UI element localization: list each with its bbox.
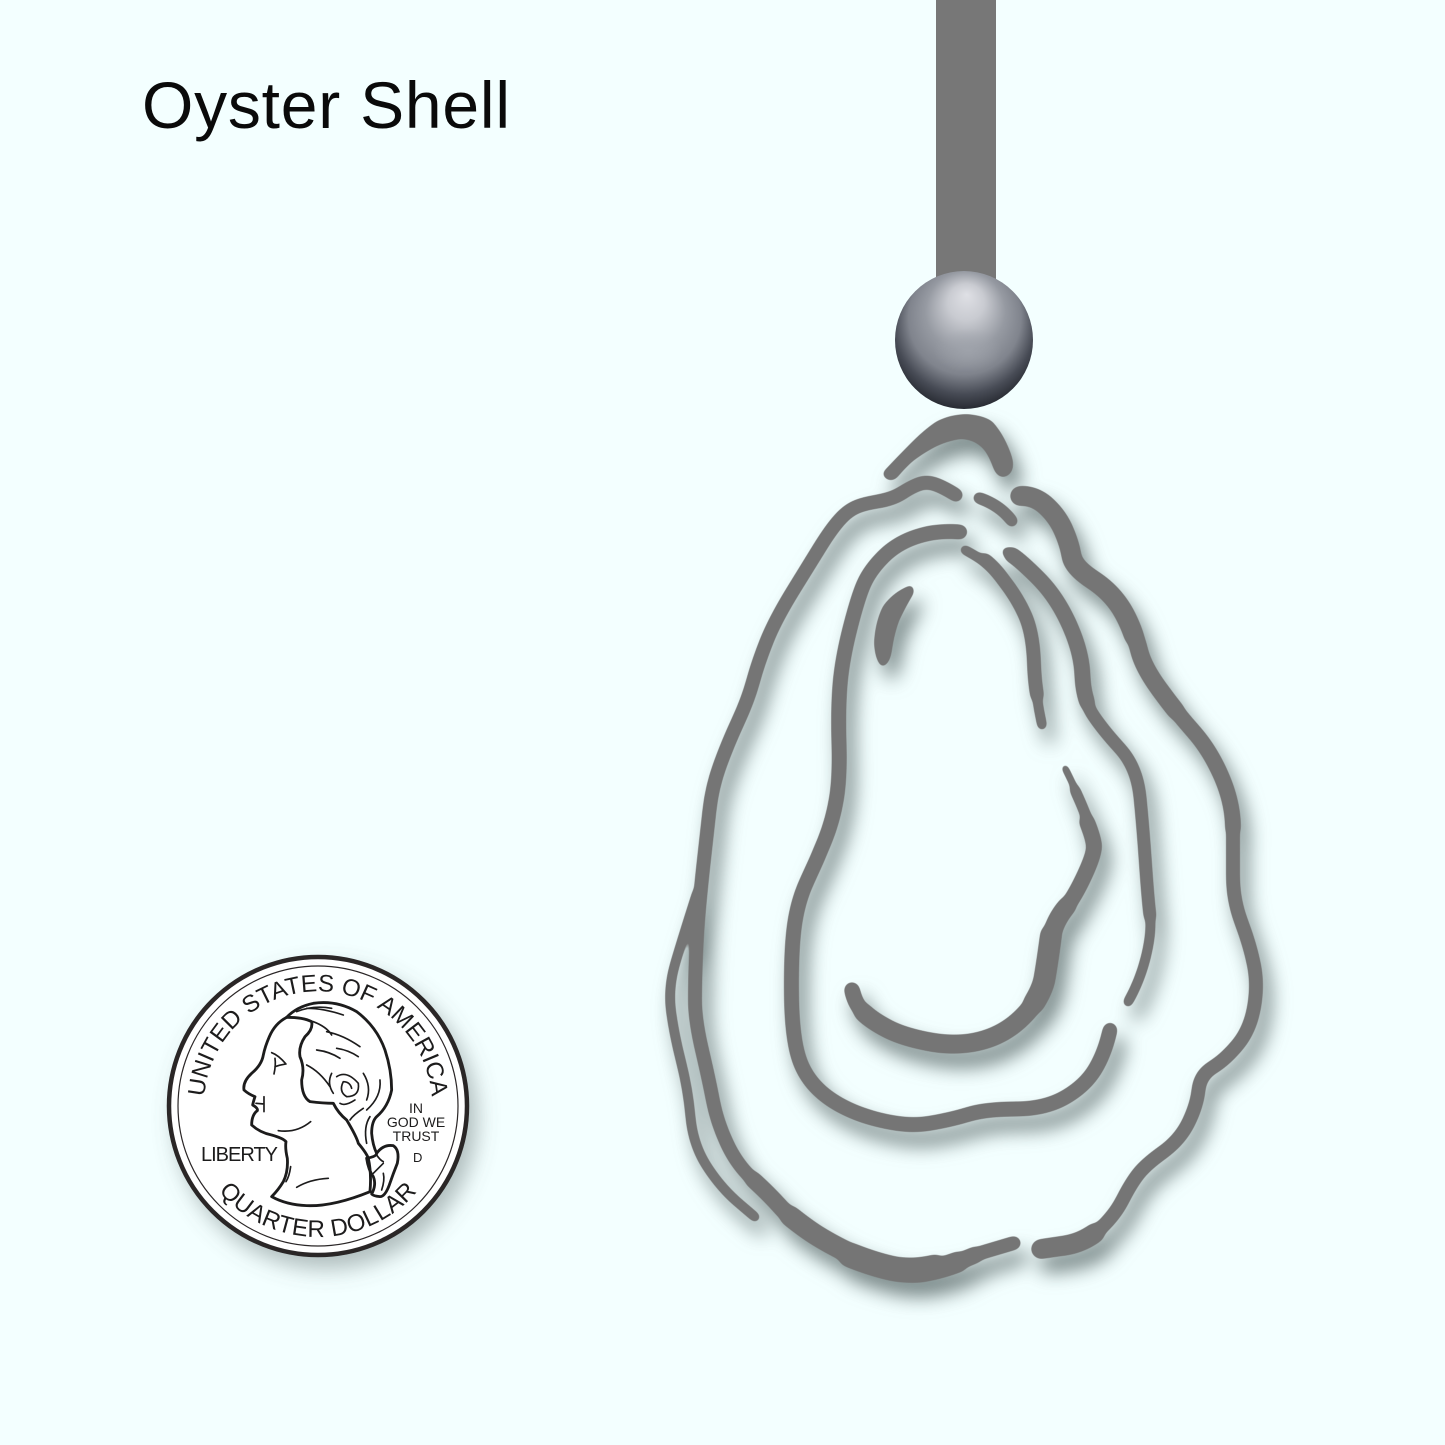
oyster shell outline xyxy=(670,414,1256,1272)
shell: adductor arc end xyxy=(852,990,887,1028)
title: Oyster Shell xyxy=(142,68,510,142)
shell: outer left edge xyxy=(695,483,1014,1272)
shell: middle right arc xyxy=(1007,552,1150,1002)
shell: adductor arc thick side xyxy=(1034,935,1051,1003)
coin: mint mark: D xyxy=(413,1150,422,1165)
shell: adductor arc bottom xyxy=(863,906,1067,1044)
shell: middle right arc top band xyxy=(1012,555,1087,702)
shell: outer right edge xyxy=(1020,496,1256,1249)
pearl ball xyxy=(895,271,1033,409)
shell: adductor arc upper xyxy=(1075,790,1094,845)
coin: motto: IN xyxy=(409,1100,423,1116)
portrait: eye and brow xyxy=(272,1053,286,1074)
quarter coin xyxy=(163,954,489,1281)
shell: inner mid arc band xyxy=(985,560,1037,695)
portrait: face and bust xyxy=(244,1017,370,1206)
portrait: mouth xyxy=(256,1097,264,1112)
shell: adductor arc middle xyxy=(1050,822,1094,944)
shell: inner mid arc xyxy=(965,550,1042,725)
shell: middle right arc lower band xyxy=(1082,676,1150,916)
coin: bottom inscription: QUARTER DOLLAR xyxy=(222,1183,416,1238)
coin: portrait of Washington xyxy=(243,1003,398,1206)
shell: thick bottom left xyxy=(790,1216,958,1272)
shell: upper right band xyxy=(1139,650,1233,828)
coin: inner ring xyxy=(178,966,458,1246)
shell: left branch xyxy=(670,893,755,1217)
shell: adductor arc tip xyxy=(1065,768,1086,817)
portrait: jaw and chest lines xyxy=(278,1122,328,1187)
shell: small hinge dash xyxy=(979,498,1012,521)
shell: thick bottom right end xyxy=(1041,1233,1095,1249)
shell: thick top right xyxy=(1020,496,1134,636)
shell: thick upper right band xyxy=(1124,613,1176,711)
coin: disc xyxy=(169,957,467,1255)
shell: thickest bottom xyxy=(850,1255,935,1270)
shell: inner arc xyxy=(791,532,1110,1125)
rod xyxy=(936,0,996,285)
portrait: hair strands xyxy=(297,1007,380,1143)
coin: top inscription: UNITED STATES OF AMERICA xyxy=(188,974,448,1097)
coin: LIBERTY: LIBERTY xyxy=(201,1144,278,1166)
portrait: hair front and queue xyxy=(287,1017,371,1192)
portrait: hair crown xyxy=(287,1003,392,1153)
coin: motto: GOD WE xyxy=(387,1114,445,1130)
shell: small crescent xyxy=(874,585,914,667)
coin: motto: TRUST xyxy=(393,1128,440,1144)
shell: hinge cap xyxy=(883,414,1013,480)
portrait: ribbon bow xyxy=(367,1145,398,1197)
shell: thick lower left xyxy=(753,1180,975,1272)
